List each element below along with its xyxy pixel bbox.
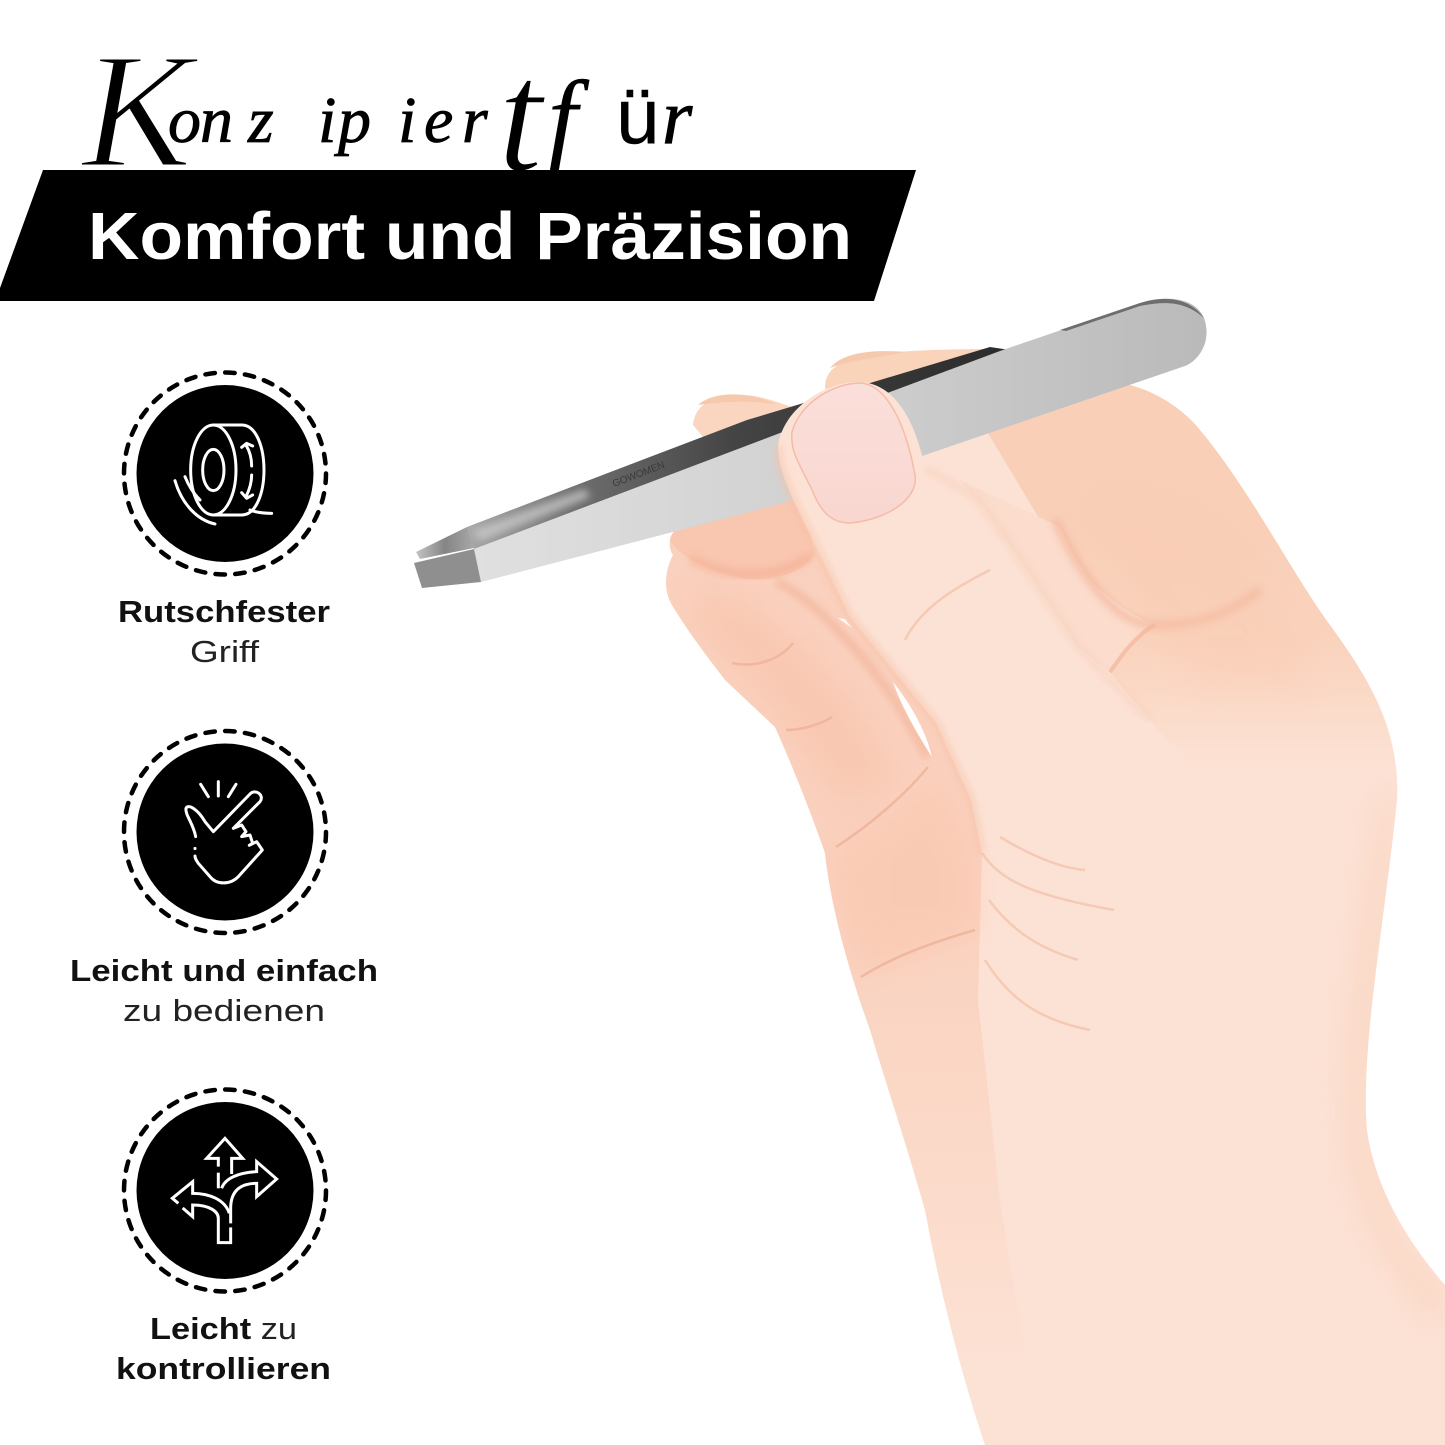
tweezers tip nub <box>416 527 474 559</box>
tweezers front arm <box>474 299 1207 582</box>
tweezers tip <box>414 549 481 588</box>
script heading <box>80 19 693 205</box>
brand engraving: GOWOMEN <box>611 460 666 490</box>
finger creases <box>732 643 975 977</box>
tweezers back arm <box>467 347 1010 549</box>
script heading: e <box>424 84 453 157</box>
icon: tape roll badge <box>124 372 326 574</box>
script heading: K <box>80 19 200 202</box>
script heading: o <box>168 84 201 157</box>
tweezers <box>414 299 1207 588</box>
label: non-slip grip: Rutschfester <box>118 594 330 629</box>
script heading: ü <box>616 72 659 160</box>
icon: finger snap badge <box>124 731 326 933</box>
script heading: t <box>498 27 546 205</box>
script heading: r <box>462 84 488 157</box>
script heading: z <box>247 84 274 157</box>
outer right edge shading <box>1345 814 1442 1312</box>
script heading: i <box>318 84 336 157</box>
thumb wrinkles <box>905 570 1114 1030</box>
hand holding tweezers <box>414 299 1445 1445</box>
script heading: i <box>398 84 416 157</box>
shadow between fingers <box>776 582 928 757</box>
feature: easy to control <box>116 1090 331 1386</box>
label: non-slip grip <box>118 594 330 669</box>
thumb with nail <box>778 382 1200 1030</box>
back finger tips <box>693 349 1080 470</box>
label: easy to control <box>116 1311 331 1386</box>
finger under tweezers <box>670 500 815 579</box>
label: easy to control: Leicht zu <box>150 1311 297 1346</box>
fingernail <box>792 383 915 523</box>
feature: easy to use <box>70 731 378 1028</box>
index knuckle segment <box>1038 517 1150 658</box>
label: non-slip grip: Griff <box>190 634 259 669</box>
label: easy to control: kontrollieren <box>116 1351 331 1386</box>
script heading: f <box>548 59 590 176</box>
icon: branching arrows badge <box>124 1090 326 1292</box>
gaps between fingers <box>893 682 932 757</box>
label: easy to use: Leicht und einfach <box>70 953 378 988</box>
left fingers <box>666 533 1004 1444</box>
feature: non-slip grip <box>118 372 330 669</box>
black banner <box>0 170 916 301</box>
script heading: n <box>200 84 233 157</box>
script heading: p <box>334 84 371 157</box>
label: easy to use: zu bedienen <box>123 993 325 1028</box>
banner title: Komfort und Präzision <box>88 199 852 274</box>
label: easy to use <box>70 953 378 1028</box>
script heading: r <box>662 73 693 160</box>
upper right finger <box>980 385 1400 800</box>
palm and fingers <box>640 385 1445 1445</box>
